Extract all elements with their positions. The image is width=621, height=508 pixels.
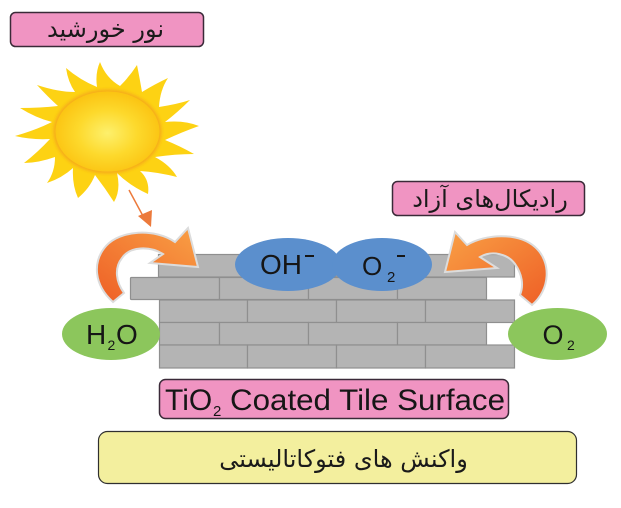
molecule: O2: O [542, 320, 564, 350]
label: TiO2 coated tile surface: Coated Tile Surface [230, 384, 505, 417]
molecule: H2O: O [116, 319, 138, 350]
molecule: OH-: OH [260, 249, 302, 280]
molecule: O2: 2 [567, 337, 575, 353]
label: sunlight: نور خورشید [47, 15, 164, 43]
molecule: H2O [62, 308, 160, 360]
caption: photocatalytic reactions [98, 432, 576, 484]
molecule: H2O: 2 [108, 337, 116, 353]
label: TiO2 coated tile surface: 2 [213, 403, 221, 420]
label: free radicals: رادیکال‌های آزاد [412, 184, 568, 213]
molecule: H2O: H [86, 319, 106, 350]
caption: photocatalytic reactions: واکنش های فتوکاتالیستی [219, 445, 468, 473]
molecule: O2- [332, 238, 432, 291]
label: sunlight [10, 12, 204, 46]
label: free radicals [392, 182, 584, 216]
icon: sun [15, 62, 199, 202]
tile wall [130, 254, 514, 368]
arrow: sunlight to surface [129, 190, 152, 227]
arrow: H2O to surface [97, 228, 198, 302]
molecule: O2 [508, 308, 607, 360]
label: TiO2 coated tile surface: TiO [165, 384, 212, 417]
molecule: O2-: 2 [387, 269, 395, 286]
molecule: OH- [235, 238, 341, 291]
molecule: O2-: O [362, 251, 382, 281]
arrow: O2 to surface [445, 232, 547, 305]
label: TiO2 coated tile surface [160, 380, 508, 420]
